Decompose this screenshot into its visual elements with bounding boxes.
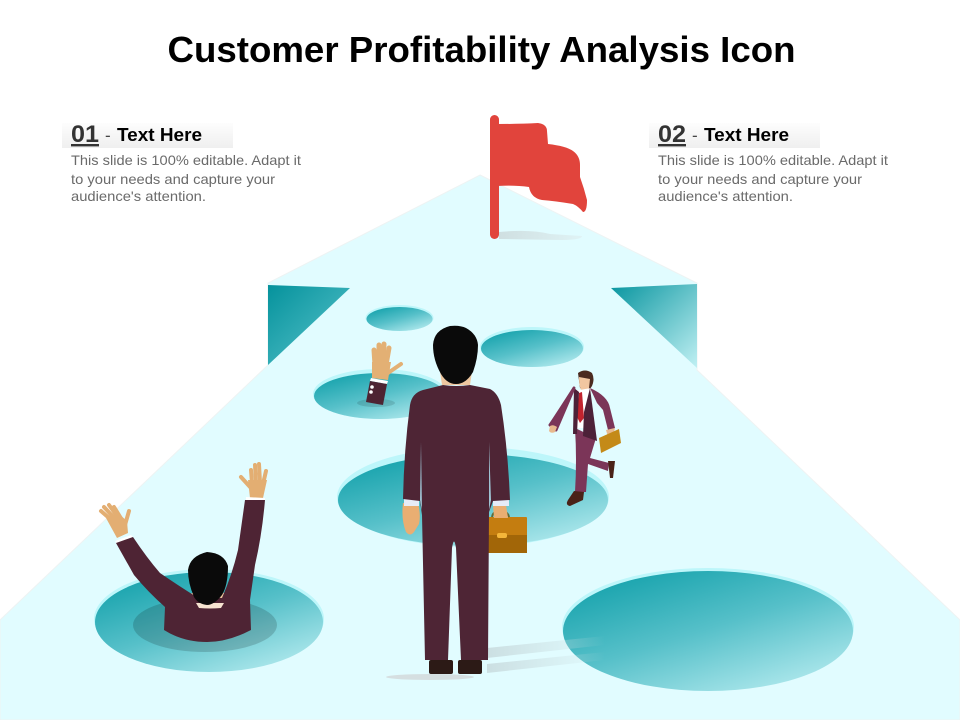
right arrow fold (611, 284, 697, 368)
flag (490, 115, 587, 240)
text block 02 (649, 121, 888, 204)
text block 01: - (105, 126, 111, 145)
text block 02: 02 (658, 121, 686, 148)
drowning hand icon (357, 344, 401, 407)
text block 02: - (692, 126, 698, 145)
hole: with hand (313, 369, 447, 419)
text block 01: audience's attention. (71, 188, 206, 204)
right hand (241, 464, 266, 488)
text block 02: audience's attention. (658, 188, 793, 204)
arm gaps (420, 442, 422, 510)
floor shadows (386, 636, 605, 680)
arrow path background (0, 175, 960, 720)
text block 02: Text Here (704, 125, 789, 145)
text block 01: 01 (71, 121, 99, 148)
man in bottom-left hole, arms raised (101, 464, 267, 642)
text block 01: This slide is 100% editable. Adapt it (71, 152, 301, 168)
running businessman (549, 370, 621, 506)
hole: centre (337, 447, 609, 547)
main businessman, back view (386, 326, 605, 680)
briefcase (488, 511, 527, 553)
left hand (101, 505, 129, 525)
hole: top right (480, 327, 584, 367)
text block 01 (62, 121, 301, 204)
title: Customer Profitability Analysis Icon (168, 29, 796, 70)
text block 01: Text Here (117, 125, 202, 145)
trousers (575, 428, 609, 492)
hole: top small (366, 305, 434, 331)
text block 02: This slide is 100% editable. Adapt it (658, 152, 888, 168)
jacket (573, 388, 579, 434)
text block 01: to your needs and capture your (71, 171, 275, 187)
hole: bottom left (94, 569, 324, 672)
text block 02: to your needs and capture your (658, 171, 862, 187)
left arrow fold (268, 285, 350, 365)
hole: bottom right (562, 568, 854, 691)
